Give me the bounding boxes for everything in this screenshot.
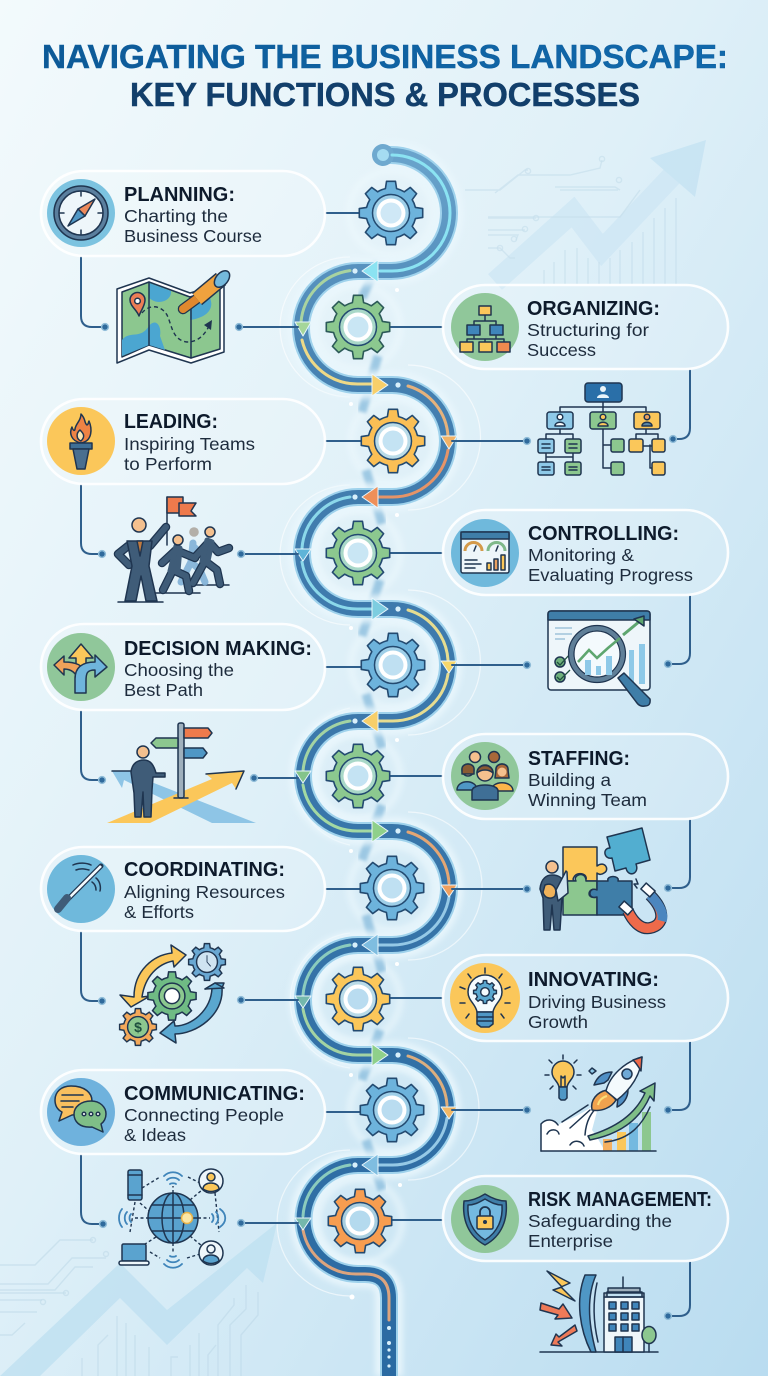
- illustration: rocket launch: [541, 1055, 656, 1151]
- icon: hierarchy: [451, 293, 519, 361]
- panel: planning: Business Course: [124, 226, 262, 246]
- gear: organizing: [326, 295, 390, 359]
- panel: innovating: Growth: [528, 1012, 588, 1032]
- icon: team of people: [451, 742, 519, 810]
- title: [42, 38, 728, 113]
- panel: coordinating: Aligning Resources: [124, 882, 285, 902]
- panel: risk management: RISK MANAGEMENT:: [528, 1189, 712, 1211]
- panel: staffing: Building a: [528, 770, 611, 790]
- winding process road: [277, 144, 482, 1376]
- panel: communicating: Connecting People: [124, 1105, 284, 1125]
- panel: risk management: Safeguarding the: [528, 1211, 672, 1231]
- icon: light bulb with gear: [450, 963, 520, 1033]
- gear: coordinating: [360, 856, 424, 920]
- illustration: magnifier over analytics: [548, 611, 650, 706]
- panel: decision making: Best Path: [124, 680, 203, 700]
- panel: communicating: COMMUNICATING:: [124, 1083, 305, 1105]
- panel: controlling: Evaluating Progress: [528, 565, 693, 585]
- illustration: map and spyglass: [117, 268, 233, 363]
- panel: planning: Charting the: [124, 206, 228, 226]
- panel: communicating: [41, 1070, 325, 1154]
- icon: torch: [47, 407, 115, 475]
- panel: coordinating: COORDINATING:: [124, 859, 285, 881]
- illustration: leader and team: [118, 497, 229, 602]
- panel: planning: PLANNING:: [124, 184, 235, 206]
- panel: staffing: Winning Team: [528, 790, 647, 810]
- panel: controlling: Monitoring &: [528, 545, 634, 565]
- icon: branching arrows: [47, 633, 115, 701]
- illustration: puzzle and magnet: [540, 828, 662, 930]
- background: growth arrow top right: [465, 140, 706, 284]
- gear: innovating: [326, 967, 390, 1031]
- title: KEY FUNCTIONS & PROCESSES: [130, 76, 640, 113]
- panel: leading: Inspiring Teams: [124, 434, 255, 454]
- panel: coordinating: [41, 847, 325, 931]
- panel: staffing: STAFFING:: [528, 748, 630, 770]
- panel: decision making: Choosing the: [124, 660, 234, 680]
- panel: communicating: & Ideas: [124, 1125, 186, 1145]
- panel: decision making: DECISION MAKING:: [124, 638, 312, 660]
- panel: staffing: [443, 734, 728, 819]
- gear: leading: [361, 409, 425, 473]
- panel: organizing: Structuring for: [527, 320, 649, 340]
- icon: dashboard: [451, 519, 519, 587]
- background: growth arrow bottom left: [0, 1223, 277, 1376]
- panel: leading: to Perform: [124, 454, 212, 474]
- icon: compass: [47, 179, 115, 247]
- gear: risk management: [328, 1189, 392, 1253]
- panel: controlling: CONTROLLING:: [528, 523, 679, 545]
- panel: leading: LEADING:: [124, 411, 218, 433]
- title: NAVIGATING THE BUSINESS LANDSCAPE:: [42, 38, 728, 75]
- gear: planning: [359, 181, 423, 245]
- illustration: organisation chart: [538, 383, 665, 475]
- panel: innovating: Driving Business: [528, 992, 666, 1012]
- illustration: crossroads and signpost: [107, 723, 256, 823]
- illustration: rotating gears: $: [134, 1019, 142, 1035]
- panel: organizing: [443, 285, 728, 369]
- panel: leading: [41, 399, 325, 484]
- illustration: global network: [119, 1169, 225, 1268]
- panel: decision making: [41, 624, 325, 710]
- illustration: rotating gears: [120, 944, 225, 1045]
- icon: security shield: [451, 1185, 519, 1253]
- gear: controlling: [326, 521, 390, 585]
- connector lines: [81, 213, 690, 1319]
- panel: innovating: [443, 955, 728, 1041]
- panel: risk management: [443, 1176, 728, 1261]
- panel: controlling: [443, 510, 728, 595]
- panel: organizing: Success: [527, 340, 596, 360]
- gear: staffing: [326, 744, 390, 808]
- panel: organizing: ORGANIZING:: [527, 298, 660, 320]
- panel: coordinating: & Efforts: [124, 902, 194, 922]
- gear: decision making: [361, 633, 425, 697]
- icon: chat bubbles: [47, 1078, 115, 1146]
- icon: conductor baton: [47, 855, 115, 923]
- panel: planning: [41, 171, 325, 256]
- gear: communicating: [360, 1078, 424, 1142]
- panel: innovating: INNOVATING:: [528, 969, 659, 991]
- illustration: protected building: [540, 1271, 658, 1352]
- panel: risk management: Enterprise: [528, 1231, 613, 1251]
